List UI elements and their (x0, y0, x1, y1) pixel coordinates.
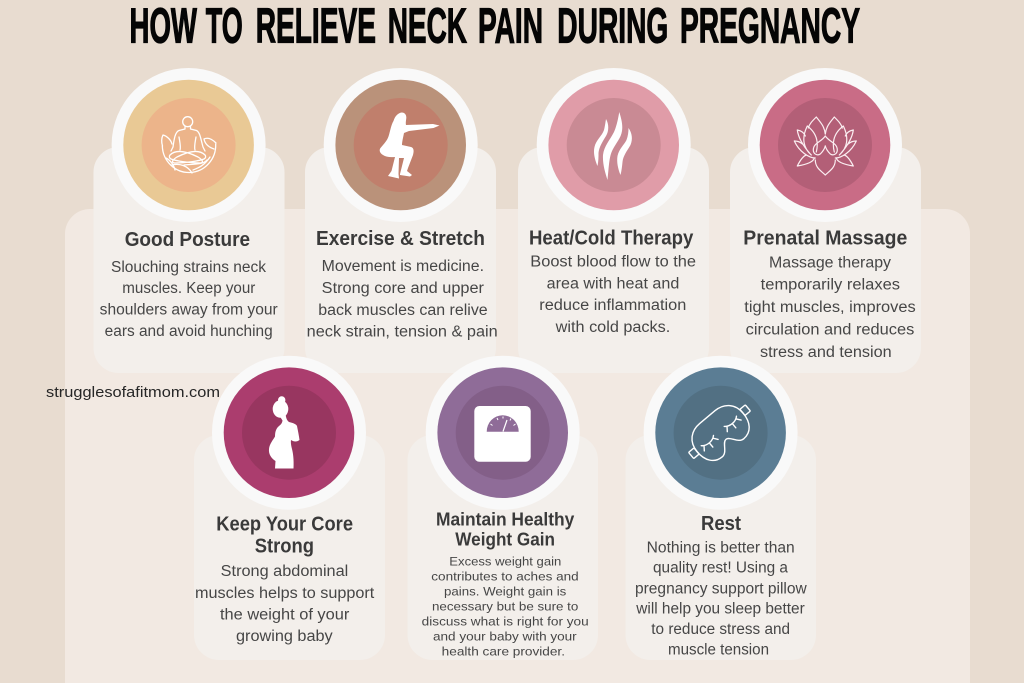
title (130, 0, 860, 54)
title: TO (206, 0, 243, 54)
card: prenatal massage (730, 68, 921, 373)
title: DURING (557, 0, 668, 54)
text: heat and cold therapy: reduce inflammation (539, 297, 686, 314)
card: maintain healthy weight gain (408, 356, 598, 660)
icon: flames (537, 68, 691, 222)
watermark: strugglesofafitmom.com (46, 385, 220, 401)
text: maintain healthy weight gain: Excess weight gain (449, 554, 561, 568)
text: prenatal massage: stress and tension (760, 344, 892, 361)
title: PREGNANCY (680, 0, 860, 54)
text: rest: quality rest! Using a (653, 560, 788, 577)
text: rest: Rest (701, 513, 741, 535)
text: good posture: Slouching strains neck (111, 259, 266, 276)
title: NECK (388, 0, 467, 54)
text: good posture: muscles. Keep your (122, 280, 255, 297)
text: exercise and stretch: Strong core and upper (322, 280, 484, 297)
text: maintain healthy weight gain: health care provider. (442, 644, 565, 658)
card: exercise and stretch (305, 68, 496, 373)
card: keep your core strong (194, 356, 385, 660)
text: exercise and stretch (307, 228, 498, 341)
text: exercise and stretch: Movement is medicine. (322, 258, 484, 275)
text: good posture: Good Posture (125, 229, 250, 251)
text: keep your core strong: growing baby (236, 628, 333, 645)
text: heat and cold therapy: with cold packs. (555, 319, 670, 336)
card: rest (626, 356, 816, 660)
text: rest: to reduce stress and (651, 621, 790, 638)
text: keep your core strong: Strong (255, 536, 314, 558)
text: maintain healthy weight gain: contributes to aches and (431, 569, 579, 583)
text: prenatal massage: Prenatal Massage (743, 227, 907, 249)
text: heat and cold therapy (529, 227, 696, 336)
text: exercise and stretch: back muscles can relive (318, 302, 488, 319)
text: exercise and stretch: neck strain, tension & pain (307, 324, 498, 341)
text: prenatal massage: circulation and reduces (746, 321, 915, 338)
text: rest (635, 513, 808, 659)
icon: lotus (748, 68, 902, 222)
text: rest: will help you sleep better (635, 601, 805, 618)
text: maintain healthy weight gain (422, 509, 589, 658)
text: prenatal massage: Massage therapy (769, 255, 891, 272)
text: heat and cold therapy: area with heat and (547, 275, 679, 292)
text: maintain healthy weight gain: pains. Weight gain is (444, 584, 566, 598)
text: prenatal massage: temporarily relaxes (761, 276, 900, 293)
card: good posture (94, 68, 284, 373)
text: keep your core strong: muscles helps to support (195, 585, 375, 602)
icon: meditation (112, 68, 266, 222)
text: keep your core strong: the weight of your (220, 607, 349, 624)
card: heat and cold therapy (518, 68, 709, 373)
title: RELIEVE (256, 0, 376, 54)
background panel (65, 209, 970, 683)
icon: pregnant woman (212, 356, 366, 510)
text: heat and cold therapy: Heat/Cold Therapy (529, 227, 694, 249)
text: good posture (100, 229, 278, 340)
text: rest: muscle tension (668, 642, 769, 659)
text: maintain healthy weight gain: Maintain Healthy (436, 509, 575, 530)
text: maintain healthy weight gain: and your baby with your (433, 629, 577, 643)
icon: weight scale (426, 356, 580, 510)
title: HOW (130, 0, 197, 54)
text: good posture: shoulders away from your (100, 302, 278, 318)
text: rest: pregnancy support pillow (635, 580, 808, 597)
text: maintain healthy weight gain: Weight Gain (455, 529, 555, 550)
text: maintain healthy weight gain: discuss what is right for you (422, 614, 589, 628)
text: keep your core strong: Strong abdominal (221, 563, 348, 580)
text: heat and cold therapy: Boost blood flow to the (530, 253, 696, 270)
icon: sleep mask (644, 356, 798, 510)
text: prenatal massage: tight muscles, improves (744, 299, 916, 316)
title: PAIN (478, 0, 543, 54)
text: exercise and stretch: Exercise & Stretch (316, 228, 485, 250)
text: keep your core strong (195, 514, 375, 645)
text: keep your core strong: Keep Your Core (216, 514, 353, 536)
text: good posture: ears and avoid hunching (105, 323, 273, 340)
icon: squat (324, 68, 478, 222)
text: rest: Nothing is better than (647, 539, 795, 556)
text: maintain healthy weight gain: necessary but be sure to (432, 599, 578, 613)
text: prenatal massage (743, 227, 916, 361)
